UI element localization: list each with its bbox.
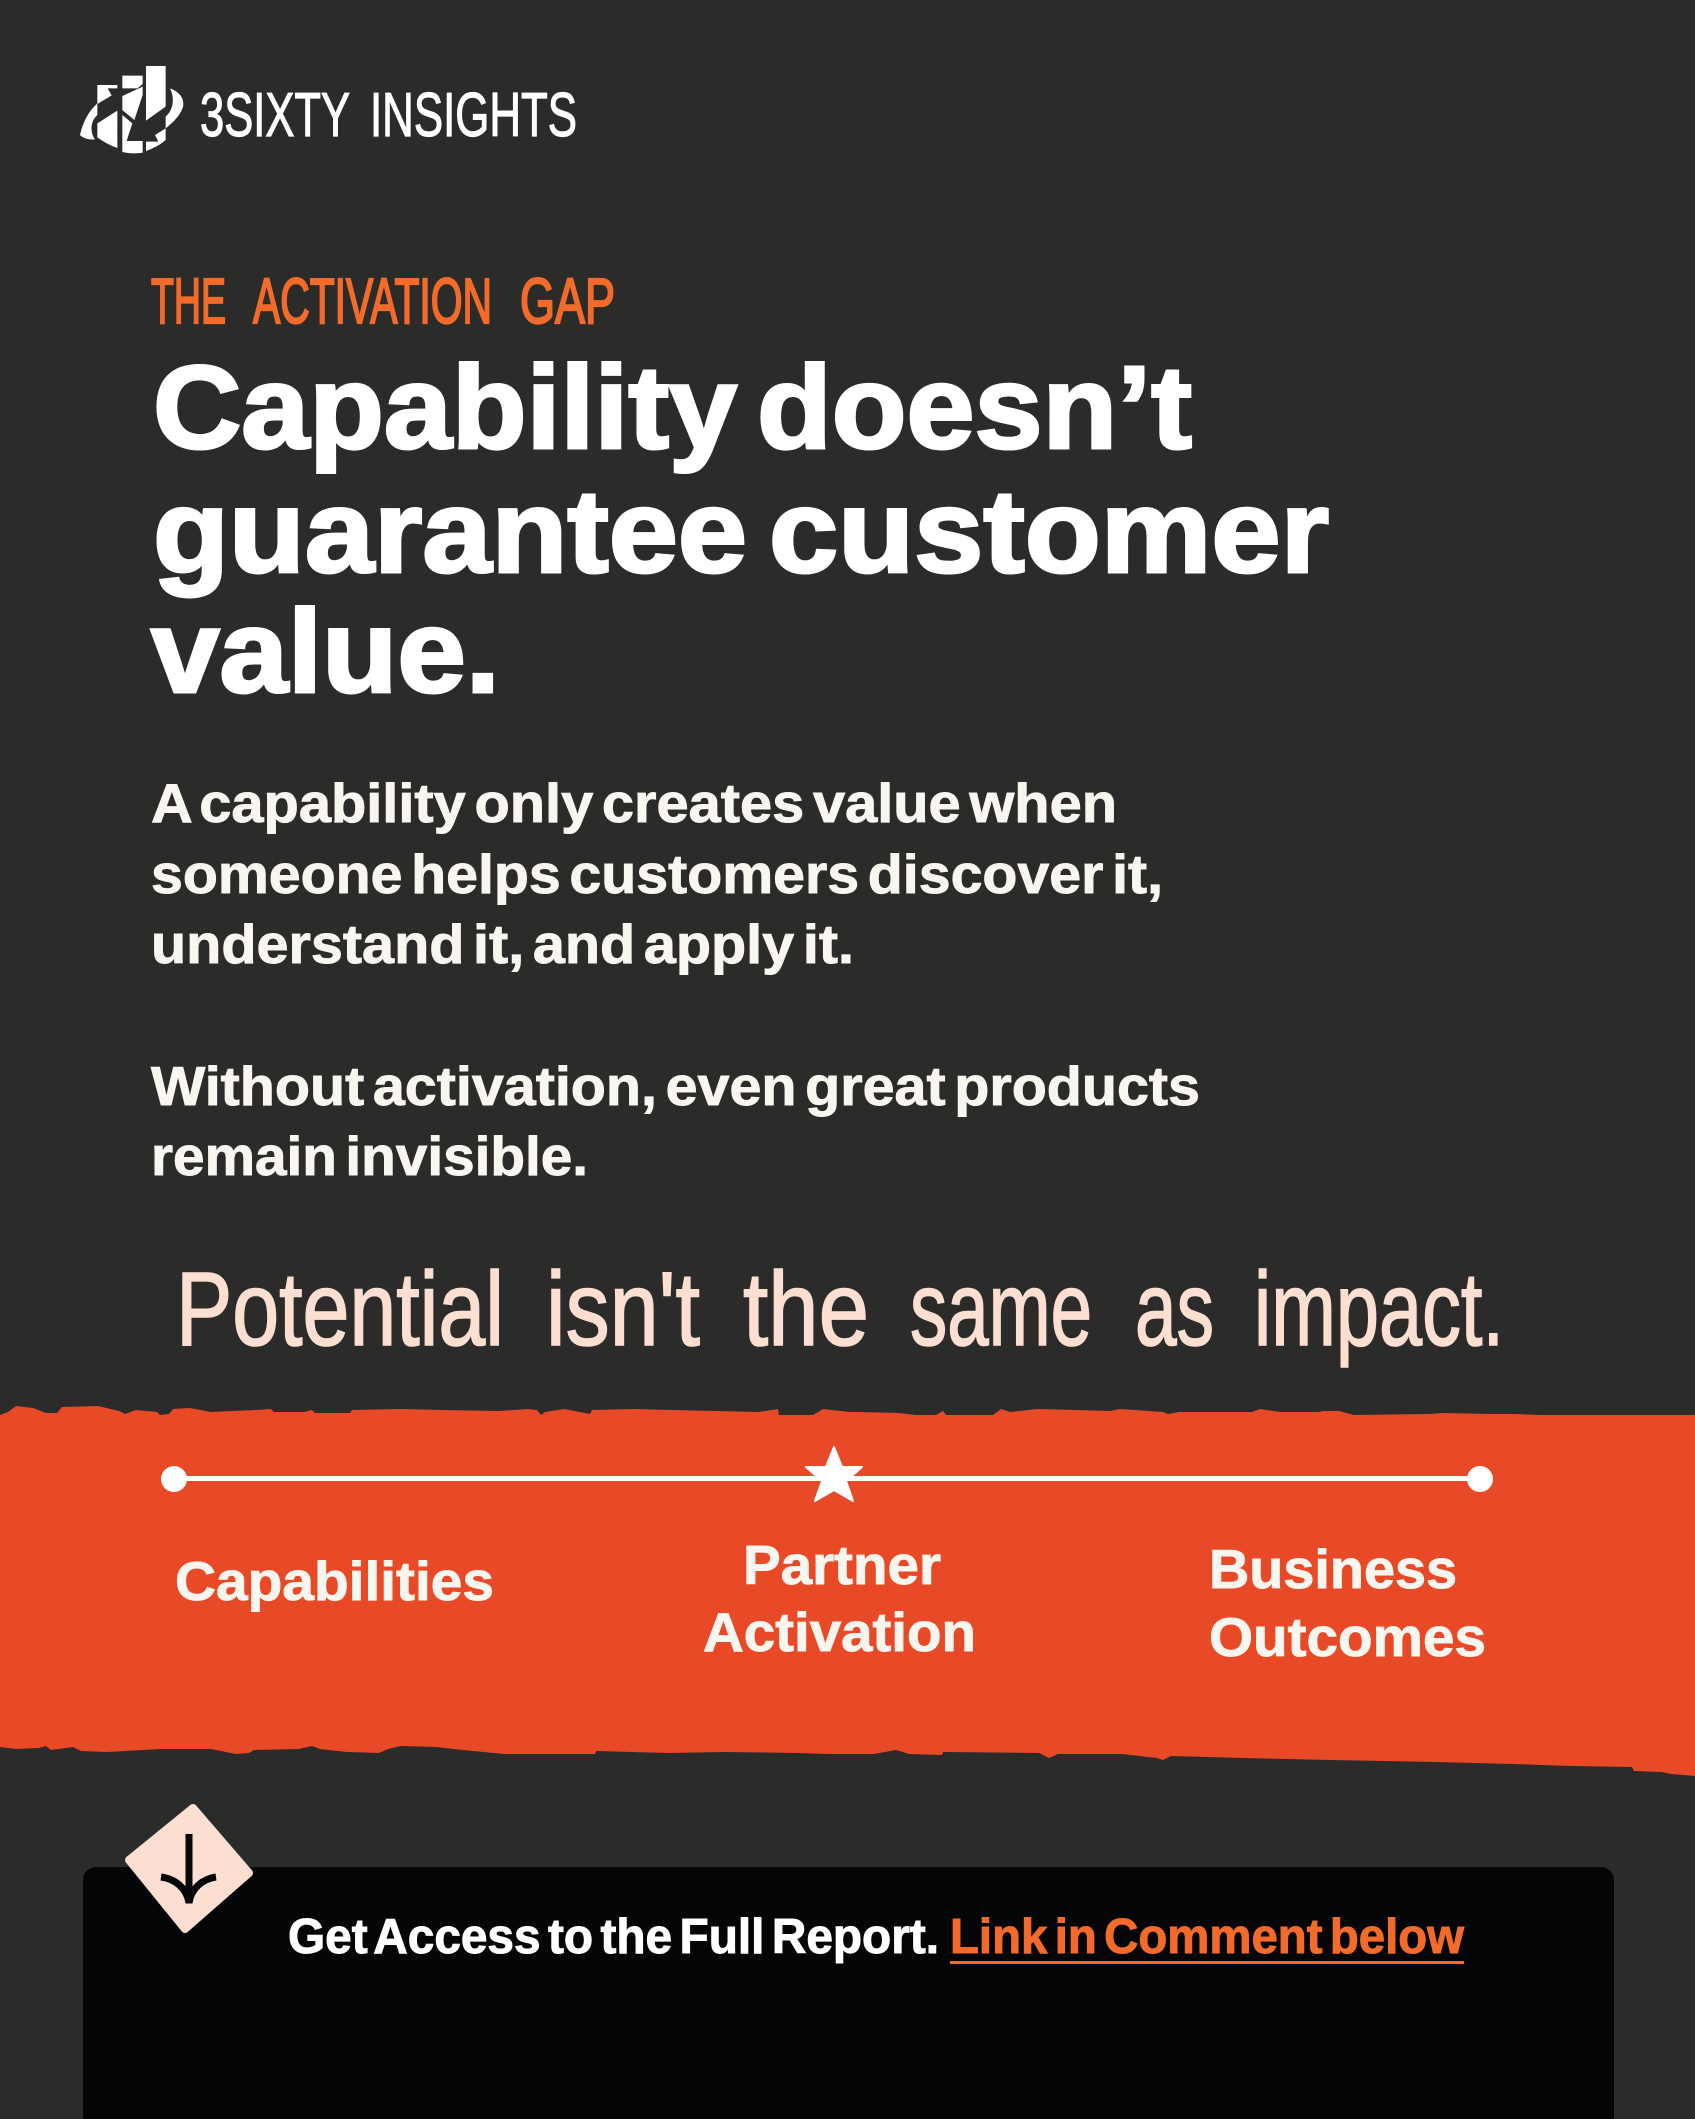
panel: orange band with timeline (0, 1406, 1695, 1776)
heading: doesn’t (757, 342, 1192, 474)
heading: Capability (153, 342, 737, 474)
icon: star (806, 1447, 862, 1501)
label: Business Outcomes: Outcomes (1209, 1606, 1486, 1668)
band shape (0, 1406, 1695, 1776)
CTA link: Link in Comment below (950, 1910, 1465, 1964)
heading: value. (151, 586, 500, 718)
tagline: Potential isn't the same as impact.: same (910, 1251, 1092, 1368)
panel: call to action card (83, 1808, 1614, 2119)
label: Business Outcomes (1209, 1538, 1486, 1668)
heading: customer (769, 466, 1329, 598)
eyebrow: THE ACTIVATION GAP: GAP (520, 265, 615, 337)
body text: remain invisible. (151, 1125, 588, 1187)
logo: 3SIXTY INSIGHTS (80, 66, 577, 153)
tagline: Potential isn't the same as impact.: the (743, 1251, 869, 1368)
logo wordmark: 3SIXTY (200, 81, 350, 150)
icon: logo mark (80, 66, 183, 153)
heading (151, 342, 1329, 718)
timeline (161, 1447, 1493, 1501)
body text: Without activation, even great products (151, 1055, 1200, 1117)
label: Partner Activation (703, 1534, 976, 1663)
body text (151, 772, 1200, 1187)
logo wordmark (200, 81, 577, 150)
logo wordmark: INSIGHTS (370, 81, 577, 150)
tagline: Potential isn't the same as impact.: Potential (176, 1251, 504, 1368)
tagline: Potential isn't the same as impact. (176, 1251, 1504, 1368)
heading: guarantee (153, 466, 747, 598)
eyebrow: THE ACTIVATION GAP: THE (151, 265, 226, 337)
card background (83, 1867, 1614, 2119)
label: Partner Activation: Activation (703, 1601, 976, 1663)
tagline: Potential isn't the same as impact.: isn't (546, 1251, 700, 1368)
label: Partner Activation: Partner (743, 1534, 941, 1596)
body text: understand it, and apply it. (151, 913, 854, 975)
body text: someone helps customers discover it, (151, 843, 1163, 905)
tagline: Potential isn't the same as impact.: as (1135, 1251, 1214, 1368)
body text: A capability only creates value when (151, 772, 1117, 834)
tagline: Potential isn't the same as impact.: impact. (1254, 1251, 1504, 1368)
label: Business Outcomes: Business (1209, 1538, 1457, 1600)
CTA text: Get Access to the Full Report. (288, 1910, 939, 1964)
label: Capabilities: Capabilities (175, 1550, 494, 1612)
eyebrow: THE ACTIVATION GAP: ACTIVATION (253, 265, 492, 337)
icon: diamond with down arrow (129, 1808, 249, 1929)
